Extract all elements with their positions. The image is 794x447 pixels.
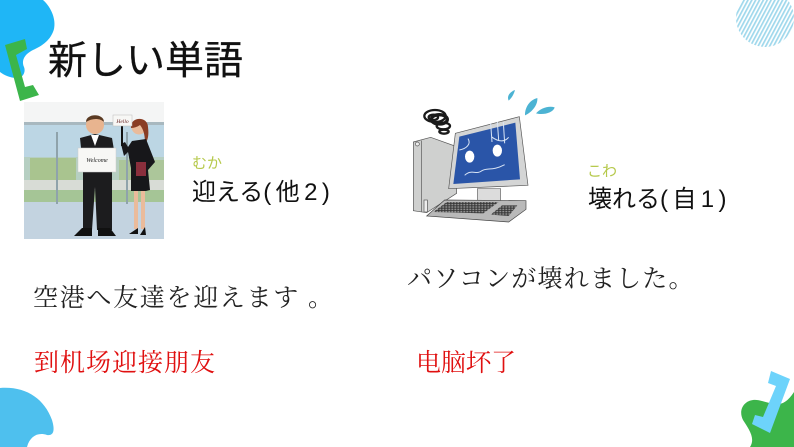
computer tower: [413, 137, 457, 213]
sweat drops: [508, 90, 555, 115]
top-right striped circle: [736, 0, 794, 47]
woman: [121, 119, 155, 235]
reading: mukaeru: むか: [192, 155, 222, 172]
title: 新しい単語: [48, 40, 243, 83]
reading: kowa: こわ: [587, 163, 617, 180]
green left bracket: [5, 39, 39, 101]
cyan right bracket: [752, 371, 790, 433]
bottom-right green blob: [741, 392, 794, 447]
picture: welcome couple at airport: [24, 102, 164, 239]
monitor: [449, 117, 528, 189]
sad face: [459, 122, 509, 175]
word: kowareru: 壊れる(自1): [588, 186, 731, 213]
bottom-left blue blob: [0, 388, 54, 447]
picture: broken computer: [413, 90, 555, 222]
keyboard: [427, 200, 526, 222]
background hall: [24, 102, 164, 239]
Japanese sentence right: パソコンが壊れました。: [407, 266, 695, 293]
top-left blue blob: [0, 0, 55, 78]
monitor stand: [477, 189, 501, 202]
hello sign: Hello: [115, 119, 129, 125]
Japanese sentence left: 空港へ友達を迎えます 。: [33, 285, 335, 312]
confused scribble: [424, 110, 450, 134]
welcome card: Welcome: [86, 158, 108, 164]
Chinese translation left: 到机场迎接朋友: [34, 350, 216, 377]
word: mukaeru: 迎える(他2): [192, 179, 334, 206]
Chinese translation right: 电脑坏了: [416, 350, 516, 377]
